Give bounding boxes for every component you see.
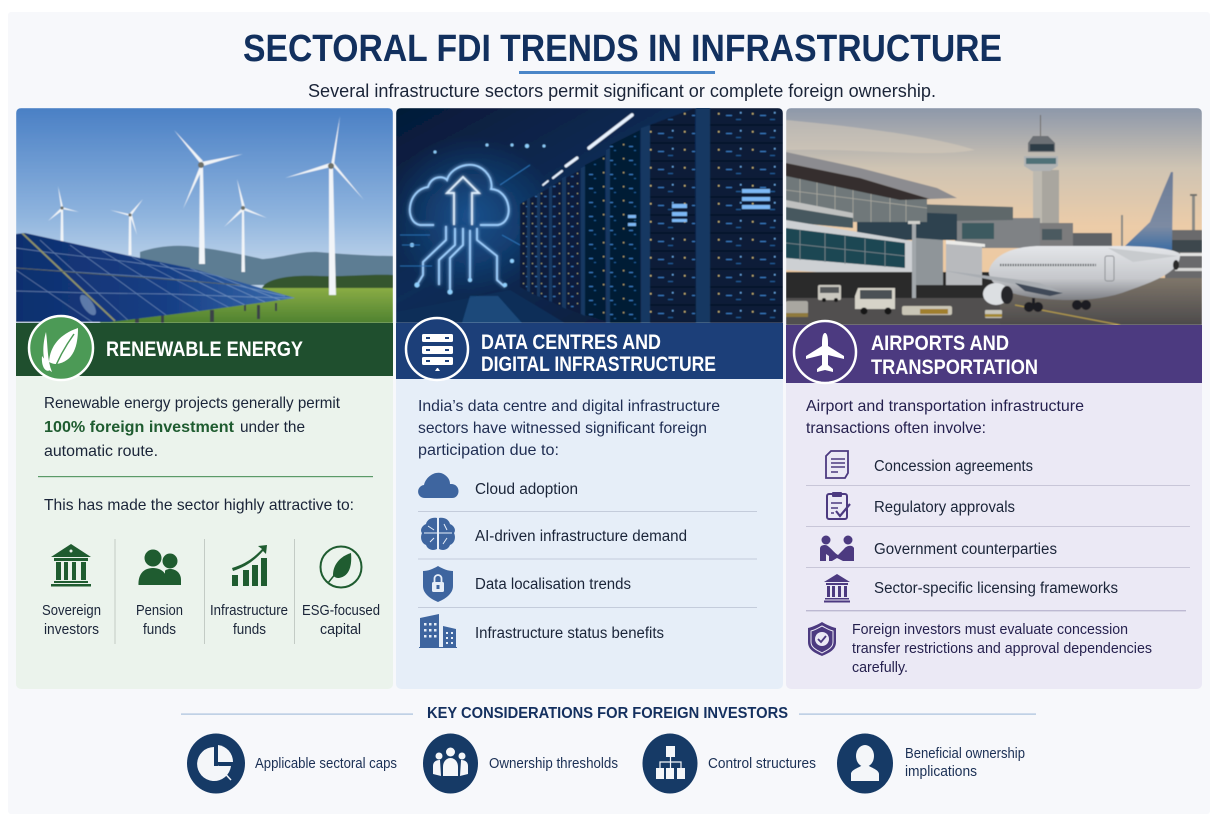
text block: airport intro: Airport and transportation infrastructure (806, 398, 1084, 415)
footer: key considerations (181, 705, 1036, 794)
text block: data centre intro: India’s data centre and digital infrastructure (418, 398, 720, 415)
list row: regulatory approvals: Regulatory approvals (874, 499, 1015, 516)
header bar (786, 325, 1202, 383)
heading: data centres: DIGITAL INFRASTRUCTURE (481, 353, 716, 376)
text block: airport intro (806, 398, 1084, 437)
investor: infrastructure funds: Infrastructure (210, 602, 288, 619)
callout: foreign investors warning: transfer restrictions and approval dependencies (852, 640, 1152, 657)
panel: data centres (385, 100, 783, 689)
item: sectoral caps (187, 734, 397, 794)
header bar (16, 323, 393, 376)
list row: regulatory approvals (827, 492, 1015, 519)
text: attractive to: This has made the sector highly attractive to: (44, 497, 354, 514)
list row: government counterparties (820, 536, 1057, 561)
panel: renewable energy (16, 108, 393, 689)
ground vehicles (786, 285, 1002, 318)
item: ownership thresholds (423, 734, 618, 794)
header bar (396, 323, 783, 379)
title: SECTORAL FDI TRENDS IN INFRASTRUCTURE (243, 28, 1002, 70)
text block: renewable intro: automatic route. (44, 443, 158, 460)
item: control structures: Control structures (708, 756, 816, 772)
text block: renewable intro: Renewable energy projects generally permit (44, 395, 341, 412)
text block: renewable intro: under the (240, 419, 305, 436)
investor: ESG-focused capital: capital (320, 621, 361, 638)
item: ownership thresholds: Ownership thresholds (489, 756, 618, 772)
list row: concession agreements (826, 451, 1033, 478)
heading: airports: AIRPORTS AND (871, 332, 1009, 355)
list row: licensing frameworks: Sector-specific licensing frameworks (874, 580, 1118, 597)
icon: plane badge (794, 321, 856, 383)
list row: cloud adoption (418, 473, 578, 498)
list row: concession agreements: Concession agreements (874, 458, 1033, 475)
item: beneficial ownership: implications (905, 764, 977, 780)
image: wind turbines and solar panels (16, 108, 393, 324)
investor: pension funds (136, 550, 183, 638)
list row: infrastructure status: Infrastructure status benefits (475, 625, 664, 642)
heading: airports (871, 332, 1038, 379)
investor: sovereign investors: investors (44, 621, 99, 638)
image: airport terminal and plane (786, 108, 1202, 325)
heading: data centres (481, 331, 716, 376)
investor: ESG-focused capital: ESG-focused (302, 602, 380, 619)
callout: foreign investors warning (808, 621, 1152, 676)
item: sectoral caps: Applicable sectoral caps (255, 756, 397, 772)
callout: foreign investors warning: carefully. (852, 659, 908, 676)
text block: data centre intro: sectors have witnessed significant foreign (418, 420, 707, 437)
heading: airports: TRANSPORTATION (871, 356, 1038, 379)
subtitle: Several infrastructure sectors permit significant or complete foreign ownership. (308, 81, 936, 101)
item: beneficial ownership (837, 734, 1025, 794)
text block: renewable intro (44, 395, 341, 460)
investor: ESG-focused capital (302, 546, 380, 638)
terminal (786, 152, 1013, 301)
investor: pension funds: Pension (136, 602, 183, 619)
investor: infrastructure funds (210, 545, 288, 638)
list row: data localisation (423, 566, 631, 602)
list row: licensing frameworks (824, 574, 1118, 602)
heading: data centres: DATA CENTRES AND (481, 331, 661, 354)
heading: key considerations: KEY CONSIDERATIONS FOR FOREIGN INVESTORS (427, 705, 788, 722)
text block: renewable intro: 100% foreign investment (44, 419, 235, 436)
text block: airport intro: transactions often involve: (806, 420, 986, 437)
investor: sovereign investors (42, 544, 101, 638)
airport tower (1024, 115, 1059, 224)
list row: government counterparties: Government counterparties (874, 541, 1057, 558)
list row: infrastructure status (419, 614, 664, 648)
investor: infrastructure funds: funds (233, 621, 266, 638)
text block: data centre intro (418, 398, 720, 459)
list row: AI demand (421, 518, 687, 550)
item: beneficial ownership: Beneficial ownership (905, 746, 1025, 762)
heading: renewable energy: RENEWABLE ENERGY (106, 338, 303, 361)
callout: foreign investors warning: Foreign investors must evaluate concession (852, 621, 1128, 638)
icon: server badge (406, 318, 468, 380)
airplane (940, 172, 1202, 312)
image: server room with cloud (385, 100, 783, 323)
investor: pension funds: funds (143, 621, 176, 638)
panel: airports (786, 108, 1202, 689)
investor: sovereign investors: Sovereign (42, 602, 101, 619)
icon: leaf badge (29, 316, 93, 380)
item: control structures (642, 734, 816, 794)
list row: cloud adoption: Cloud adoption (475, 481, 578, 498)
list row: data localisation: Data localisation trends (475, 576, 631, 593)
list row: AI demand: AI-driven infrastructure demand (475, 528, 687, 545)
text block: data centre intro: participation due to: (418, 442, 559, 459)
